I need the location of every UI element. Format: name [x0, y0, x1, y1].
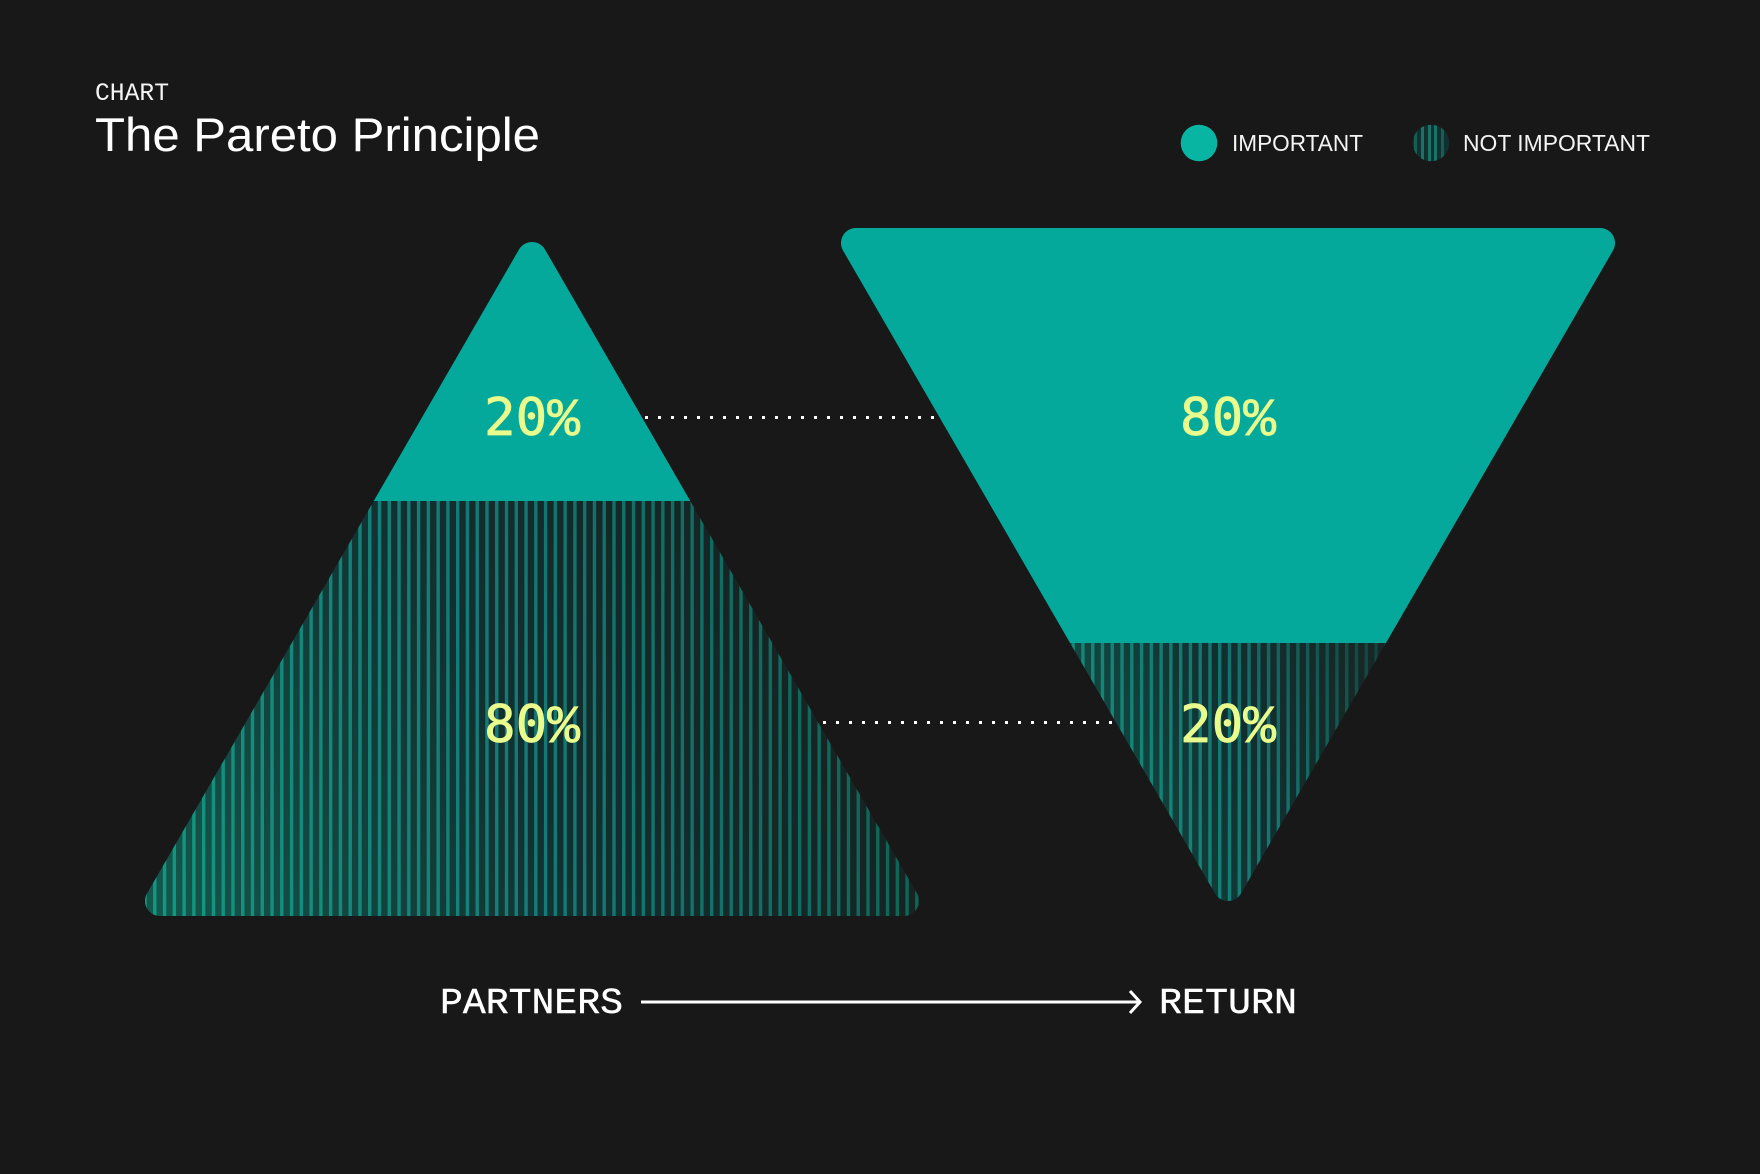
inverted segment: 80% important return	[826, 225, 1630, 643]
axis label: return: RETURN	[1159, 983, 1297, 1024]
legend swatch: not important	[1412, 124, 1450, 162]
legend swatch: important	[1181, 125, 1217, 161]
infographic canvas	[96, 83, 1650, 1014]
inverted pyramid: return	[826, 225, 1630, 908]
value: 20% partners: 20%	[484, 388, 581, 452]
dotted connector: 20% to 80%	[645, 416, 936, 419]
pyramid segment: 20% important partners	[374, 242, 690, 501]
inverted segment: 20% not important return	[1070, 643, 1386, 901]
pyramid segment: 80% not important partners	[130, 501, 934, 921]
arrow: partners to return	[641, 991, 1140, 1013]
pyramid: partners	[130, 225, 934, 921]
eyebrow label: CHART	[95, 79, 169, 108]
value: 20% return: 20%	[1180, 695, 1277, 759]
value: 80% return: 80%	[1180, 388, 1277, 452]
legend label: important: IMPORTANT	[1232, 130, 1363, 156]
value: 80% partners: 80%	[484, 695, 581, 759]
axis label: partners: PARTNERS	[440, 983, 623, 1024]
legend	[1180, 124, 1650, 162]
legend label: not important: NOT IMPORTANT	[1463, 130, 1650, 156]
title: The Pareto Principle	[95, 108, 540, 161]
dotted connector: 80% to 20%	[823, 721, 1113, 724]
